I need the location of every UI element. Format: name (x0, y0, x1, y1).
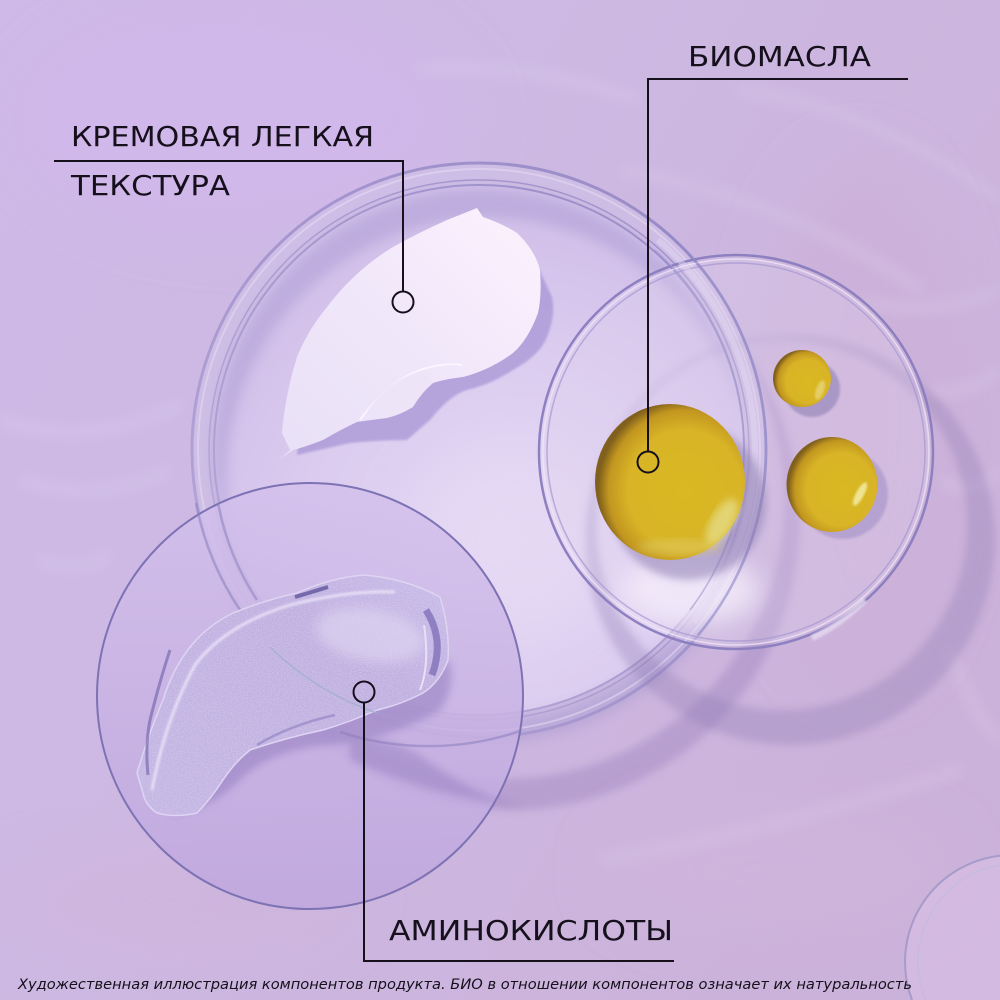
glass disc lower left (97, 483, 530, 909)
disclaimer: Художественная иллюстрация компонентов продукта. БИО в отношении компонентов означает их натуральность (17, 977, 912, 993)
callout: cream texture: ТЕКСТУРА (70, 170, 230, 202)
bottom right dish fragment (905, 856, 1000, 1000)
callout: bio oils (638, 41, 908, 472)
cast shadow of large dish (220, 221, 800, 810)
callout: bio oils: БИОМАСЛА (688, 41, 871, 73)
amino acid gel smear (137, 575, 451, 816)
large oil drop (595, 404, 766, 580)
oil drops (595, 350, 888, 580)
large petri dish (192, 163, 766, 742)
callout: cream texture: КРЕМОВАЯ ЛЕГКАЯ (71, 121, 374, 153)
callout: amino acids (354, 682, 674, 961)
under-rim shadow (214, 189, 750, 742)
callout: cream texture (54, 121, 414, 312)
cream smear (280, 208, 553, 459)
medium oil drop (786, 437, 888, 539)
small dish on the right (539, 255, 933, 649)
cast shadow of small dish (585, 335, 995, 745)
callout: amino acids: АМИНОКИСЛОТЫ (389, 915, 673, 947)
large dish right rim over small dish (655, 227, 766, 635)
small oil drop (773, 350, 840, 417)
